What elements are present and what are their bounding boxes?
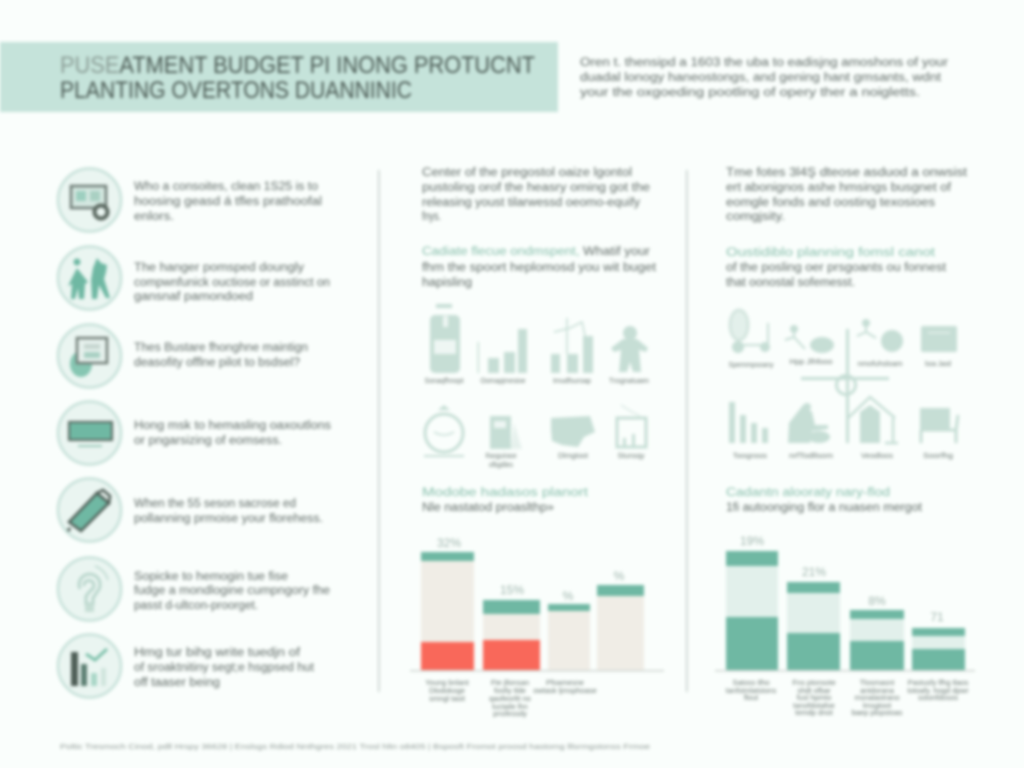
bar 1: 19% (740, 534, 764, 548)
panel: middle icon grid (424, 304, 649, 469)
panel: middle column text (422, 167, 657, 289)
panel: right column text: Tme fotes 3l4Ş dteose asduod a onwsist (726, 167, 968, 179)
list item 2: gansnaf pamondoed (134, 291, 253, 303)
icon: fuel pump (486, 416, 522, 469)
bar chart: middle (410, 536, 664, 718)
icon: fuel pump: ofbgdiles (489, 460, 513, 469)
list item 4 (58, 402, 331, 464)
bar labels: lmsgtoot (863, 701, 892, 710)
icon: chair: Soorfhg (923, 451, 953, 460)
panel: middle column text: fhm the spoort heplomosd you wit buget (422, 262, 657, 274)
bar 3 (548, 589, 590, 670)
icon: house and lamp: Veodloos (861, 451, 893, 460)
panel: middle column text: pustoling orof the heasry oming got the (422, 182, 650, 194)
bar labels: Tlosmasnt (860, 678, 895, 687)
title banner: PLANTING OVERTONS DUANNINIC (60, 77, 412, 104)
list item 5: When the 55 seson sacrose ed (134, 498, 296, 510)
column dividers (378, 170, 688, 692)
icon: branch and oval: Hpp Jlhfooo (790, 357, 832, 366)
panel: middle column text: hapisling (422, 277, 472, 289)
bar labels: antdorana (860, 686, 895, 695)
icon: framed chart: Stunsqy (618, 451, 645, 460)
bar labels: msnalastrano (854, 693, 900, 702)
list item 5: pollanning prmoise your florehess. (134, 513, 323, 525)
icon: figure (609, 326, 649, 385)
icon: branch and circle: nmofuhsloam (858, 359, 902, 368)
icon: blob (551, 416, 595, 460)
list item 7: Hmg tur bihg write tuedjn of (134, 647, 301, 659)
list item 1: Who a consoites, clean 1S25 is to (134, 181, 318, 193)
intro text (580, 57, 948, 99)
bar chart: right (715, 534, 975, 717)
bar labels: Fns ptonsote (792, 678, 836, 687)
panel: middle chart heading: Modobe hadasos planort (422, 487, 589, 499)
list item 1: hoosing geasd á tfles prathoofal (134, 196, 322, 208)
icon: box: lsoa Jaod (925, 359, 951, 368)
bar labels: Satoss tlho (732, 678, 770, 687)
bar labels: qaofeorltt no (489, 694, 531, 703)
bar labels: Fte jllonsan (491, 678, 529, 687)
bar 4 (597, 569, 644, 670)
panel: right chart heading: Cadantn alooraty nary-flod (726, 487, 890, 499)
bar 3: 8% (868, 594, 886, 608)
bar labels: baep plopstoas (852, 708, 903, 717)
footer source line: Poltic Tresmoch Cinod, pdll Hrspy 36628 | Enslsgs Rdiod Nnthgres 2021 Trosl hltn o8405 | Bsposft Fromot proosd hastomg lllsrmgstonss Frmoe (60, 742, 650, 751)
bar labels: temdp dnot (795, 708, 834, 717)
icon: blob: Dlmgtoot (558, 451, 589, 460)
list item 2 (58, 246, 330, 310)
panel: right column text: eomgle fonds and oosting texosioes (726, 197, 935, 209)
bar labels: shdt ofbar (797, 686, 831, 695)
icon: descending bars: Toosgrosos (733, 451, 767, 460)
list item 3 (58, 324, 308, 388)
icon: bottle (424, 304, 464, 385)
bar 1: 32% (437, 536, 461, 550)
panel: right column text (726, 167, 968, 289)
panel: middle chart heading: Nle nastatod proaslthp» (422, 502, 554, 514)
bar 3 (850, 594, 904, 670)
bar 4: 71 (930, 610, 944, 624)
panel: middle column text: Center of the pregostol oaize lgontol (422, 167, 632, 179)
icon: seated person: nrfTodllsom (789, 451, 833, 460)
panel: right column text: Oustidiblo planning fomsl canot (726, 247, 936, 259)
bar labels: pnsfessdy (493, 709, 527, 718)
bar 2: 15% (500, 583, 524, 597)
bar 4 (912, 610, 965, 670)
bar 2 (787, 565, 840, 670)
intro text: duadal lonogy haneostongs, and gening hant gmsants, wdnt (580, 72, 942, 84)
intro text: your the oxgoeding pootling of opery ther a noigletts. (580, 87, 920, 99)
panel: middle chart heading (422, 487, 589, 514)
bar labels: owtask ljmsphoase (533, 686, 597, 695)
bar labels: Pastusfy lfhg tlaos (908, 678, 969, 687)
icon: branch and oval (785, 325, 834, 366)
bar labels (425, 678, 597, 718)
icon: rising bars (478, 329, 527, 385)
bar labels: Pfoamesne (546, 678, 584, 687)
list item 3: Thes Bustare fhonghne maintign (134, 342, 308, 354)
icon: descending bars (729, 402, 768, 460)
bar labels: luctaile lhn (492, 702, 528, 711)
intro text: Oren t. thensipd a 1603 the uba to eadisjng amoshons of your (580, 57, 948, 69)
title banner: PUSEATMENT BUDGET PI INONG PROTUCNT (60, 52, 535, 79)
panel: right column text: ert abonignos ashe hmsings busgnet of (726, 182, 952, 194)
list item 3: deasofity offlne pilot to bsdsel? (134, 357, 300, 369)
icon: rising bars: Oomapjmesioe (480, 376, 526, 385)
icon: balloon and wheel: Spemmpsoany (728, 360, 774, 369)
list item 1: enlors. (134, 211, 174, 223)
bar 2: 21% (802, 565, 826, 579)
icon: fuel pump: Rasguirase (486, 451, 516, 460)
panel: right column text: that oonostal sofemesst. (726, 277, 855, 289)
icon: bottle: Sonaqfhnopt (424, 376, 464, 385)
bar 3: % (563, 589, 574, 603)
bar labels: fosfiy tlde (494, 686, 526, 695)
bar labels: smngl tasit (429, 694, 466, 703)
icon: seated person (788, 403, 833, 460)
panel: right icon grid (728, 310, 958, 460)
list item 2: The hanger pomsped doungly (134, 262, 304, 274)
panel: right chart heading: 1fi autoonging flor a nuasen mergot (726, 502, 923, 514)
icon: branch and circle (857, 319, 903, 368)
bar labels: tanofdotafoe (793, 701, 835, 710)
icon: box (921, 326, 957, 368)
icon: framed chart (617, 405, 646, 460)
panel: left icon list (58, 168, 331, 698)
list item 6: Sopicke to hemogin tue fise (134, 571, 288, 583)
bar labels: Dlodokoge (429, 686, 465, 695)
bar labels: sstonfdosos (918, 693, 958, 702)
bar labels: flout (744, 693, 759, 702)
panel: middle column text: releasing youst tilarwessd oeomo-equify (422, 197, 640, 209)
bar labels: Young bnlant (425, 678, 470, 687)
panel: middle column text: fnys. (422, 211, 441, 223)
panel: middle column text: Cadiate flecue ondmspent, Whatif your (422, 246, 650, 258)
list item 1 (58, 168, 322, 232)
list item 6: fudge a mondlogine cumpngory fhe (134, 585, 330, 597)
bar 1 (726, 534, 778, 670)
list item 7: off taaser being (134, 677, 220, 689)
list item 2: compwnfunick ouctiose or asstinct on (134, 277, 330, 289)
list item 7 (58, 634, 315, 698)
bar 4: % (614, 569, 625, 583)
icon: stopwatch (424, 405, 464, 457)
bar labels: totoafy. hogd dpwr (907, 686, 969, 695)
title banner (0, 42, 558, 112)
icon: chair (920, 408, 958, 460)
list item 5 (58, 478, 323, 542)
icon: figure: Tnsgnatuaen (609, 376, 649, 385)
list item 7: of sroaktnitiny segt;e hsgpsed hut (134, 662, 315, 674)
bar labels: tanfstmlatstons (726, 686, 776, 695)
icon: bars with trend: Imudfsuroap (553, 376, 591, 385)
icon: balloon and wheel (728, 310, 774, 369)
bar labels (726, 678, 969, 717)
icon: house and lamp (848, 397, 898, 460)
panel: right column text: of the posling oer prsgoants ou fonnest (726, 262, 947, 274)
list item 4: Hong msk to hemasling oaxoutlons (134, 420, 331, 432)
bar 1 (421, 536, 474, 670)
panel: right chart heading (726, 487, 923, 514)
list item 6: passt d-ultcon-proorget. (134, 600, 258, 612)
icon: bars with trend (551, 318, 593, 385)
icon: crosshair (801, 329, 889, 443)
bar labels: fusl hpmto (797, 693, 831, 702)
bar 2 (483, 583, 540, 670)
list item 4: or pngarsizing of eomsess. (134, 435, 282, 447)
list item 6 (58, 558, 330, 620)
panel: right column text: comgjsity. (726, 211, 785, 223)
